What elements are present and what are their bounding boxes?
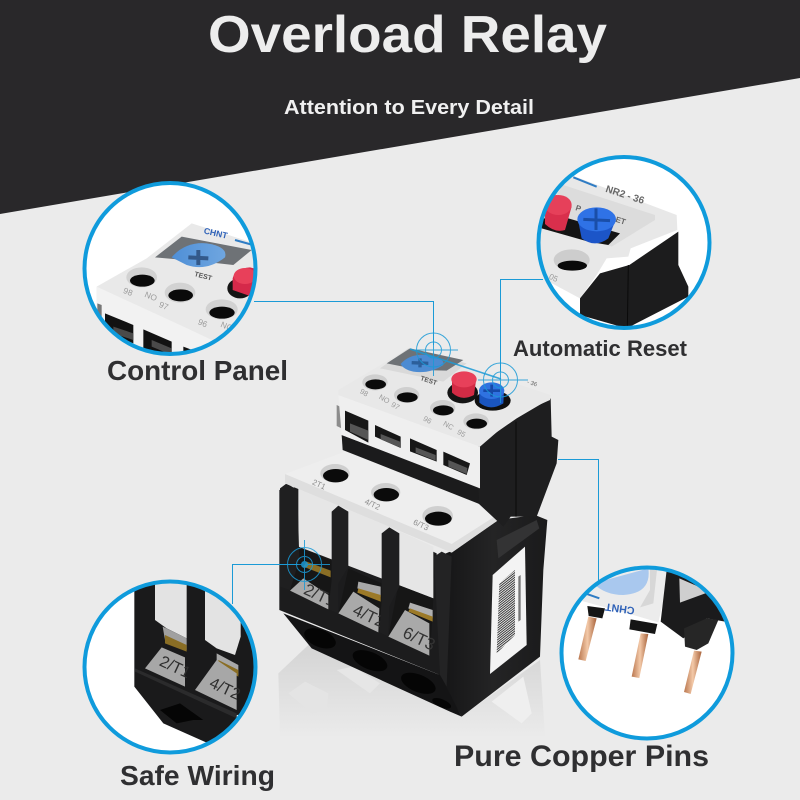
central product: overload relay — [278, 348, 558, 737]
leader line: automatic reset — [500, 280, 543, 372]
central product: overload relay: NO — [377, 392, 392, 406]
dial window — [387, 348, 463, 371]
central product: overload relay: 2T1 — [311, 478, 328, 492]
callout: copper pins: CHNT — [604, 600, 635, 616]
callout: copper pins — [557, 563, 737, 743]
callout: control panel: NO — [143, 289, 159, 303]
leader line: safe wiring — [232, 564, 298, 604]
panel print: TEST — [419, 375, 438, 387]
lower front frame — [279, 487, 440, 675]
label: pure copper pins: Pure Copper Pins — [454, 740, 709, 773]
white wall — [298, 485, 433, 598]
target marker: control panel — [410, 328, 501, 379]
red test button — [447, 371, 478, 403]
callout: control panel: CHNT — [203, 226, 229, 241]
central product: overload relay: 6/T3 — [400, 623, 438, 654]
header banner — [0, 0, 800, 214]
barcode sticker — [490, 547, 527, 674]
target marker: safe wiring — [282, 540, 330, 590]
top white plate — [285, 452, 503, 553]
upper module base — [342, 435, 479, 504]
upper module top face — [338, 348, 551, 447]
terminal bays — [290, 547, 332, 609]
holes — [362, 374, 388, 390]
callout: control panel: NC — [219, 319, 234, 333]
central product: overload relay: 97 — [390, 400, 401, 412]
terminal markings: 2/T1 — [301, 580, 339, 611]
screws — [357, 582, 381, 597]
central product: overload relay: 4/T2 — [363, 497, 382, 512]
callout: safe wiring — [80, 577, 260, 757]
target marker: automatic reset — [478, 358, 528, 403]
black ribs — [280, 483, 299, 590]
callout: control panel: 96 — [197, 317, 209, 329]
central product: overload relay: 4/T2 — [350, 600, 388, 632]
product reflection — [278, 643, 545, 737]
blue reset button — [475, 382, 511, 411]
central product: overload relay: 96 — [422, 414, 433, 426]
title: Overload Relay — [208, 6, 607, 64]
central product: overload relay: NC — [442, 419, 456, 432]
label: safe wiring: Safe Wiring — [120, 760, 275, 791]
subtitle: Attention to Every Detail — [284, 97, 534, 119]
callout: control panel: TEST — [193, 271, 213, 283]
callout: automatic reset: 05 — [547, 272, 560, 284]
leader line: control panel — [254, 302, 434, 345]
callout: automatic reset — [533, 152, 714, 332]
callout: automatic reset: NR2 - 36 — [604, 184, 646, 207]
central product: overload relay: 95 — [456, 427, 467, 439]
callout: safe wiring: 4/T2 — [207, 675, 243, 704]
label: automatic reset: Automatic Reset — [513, 336, 688, 361]
callout: automatic reset: ET — [614, 215, 627, 227]
lower feet — [283, 613, 462, 717]
central product: overload relay: - 36 — [526, 380, 538, 389]
callout: control panel — [82, 181, 258, 356]
callout: control panel: 98 — [122, 285, 135, 298]
upper module black side — [478, 398, 558, 527]
callout: safe wiring: 2/T1 — [157, 653, 193, 682]
upper module front wall — [338, 395, 480, 488]
left clip — [337, 405, 342, 428]
callout: control panel: 97 — [158, 299, 170, 312]
lower body side — [438, 515, 547, 717]
central product: overload relay: 98 — [358, 387, 370, 398]
label plates — [290, 578, 328, 609]
central product: overload relay: 6/T3 — [412, 518, 431, 533]
label: control panel: Control Panel — [107, 355, 288, 386]
callout: automatic reset: P — [574, 203, 583, 214]
leader line: copper pins — [558, 460, 598, 581]
